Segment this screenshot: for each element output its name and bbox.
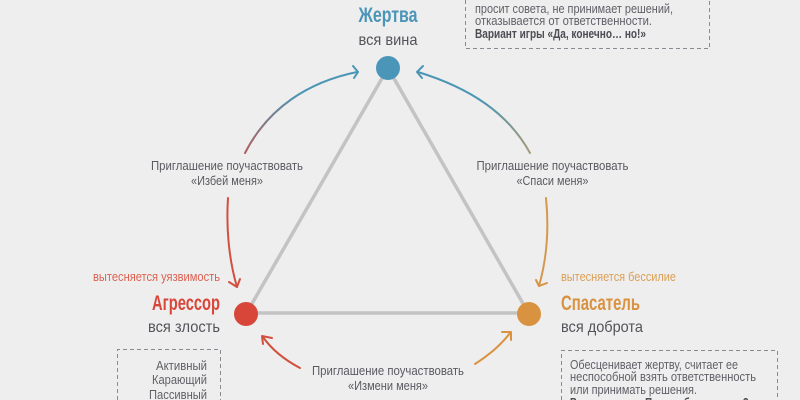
heading: rescuer bbox=[561, 269, 676, 336]
label: beat me bbox=[151, 158, 303, 188]
label: beat me: Приглашение поучаствовать bbox=[151, 158, 303, 173]
panel: victim description bbox=[466, 0, 710, 48]
node: aggressor bbox=[234, 302, 258, 326]
label: save me: «Спаси меня» bbox=[516, 173, 588, 188]
heading: aggressor: вся злость bbox=[148, 319, 220, 336]
label: save me: Приглашение поучаствовать bbox=[476, 158, 629, 173]
heading: aggressor: Агрессор bbox=[152, 292, 220, 315]
panel: victim description: просит совета, не принимает решений, bbox=[475, 1, 673, 16]
label: change me: Приглашение поучаствовать bbox=[312, 363, 464, 378]
panel: rescuer description bbox=[562, 350, 778, 400]
node: rescuer bbox=[517, 302, 541, 326]
panel: rescuer description: Обесценивает жертву, считает ее bbox=[570, 357, 738, 372]
heading: rescuer: Спасатель bbox=[561, 292, 640, 315]
panel: victim description: отказывается от ответственности. bbox=[475, 13, 652, 28]
label: save me bbox=[476, 158, 629, 188]
panel: aggressor types: Карающий bbox=[152, 372, 207, 387]
arrow: change me to aggressor bbox=[262, 336, 300, 368]
triangle diagram bbox=[246, 68, 529, 314]
arrow: rescuer to victim bbox=[417, 66, 530, 153]
label: change me bbox=[312, 363, 464, 393]
node: victim bbox=[376, 56, 400, 80]
heading: victim bbox=[358, 4, 418, 49]
heading: rescuer: вся доброта bbox=[561, 319, 643, 336]
arrow: beat me to aggressor bbox=[227, 198, 240, 287]
heading: aggressor bbox=[93, 269, 220, 336]
panel: rescuer description: или принимать решения. bbox=[570, 382, 697, 397]
arrow: change me to rescuer bbox=[475, 332, 511, 364]
arrow: aggressor to victim bbox=[245, 66, 358, 153]
arrow: save me to rescuer bbox=[536, 198, 547, 286]
heading: victim: вся вина bbox=[358, 32, 418, 49]
heading: aggressor: вытесняется уязвимость bbox=[93, 269, 220, 284]
panel: aggressor types bbox=[118, 350, 220, 400]
heading: rescuer: вытесняется бессилие bbox=[561, 269, 676, 284]
panel: victim description: Вариант игры «Да, конечно… но!» bbox=[475, 26, 646, 41]
heading: victim: Жертва bbox=[358, 4, 418, 27]
label: beat me: «Избей меня» bbox=[191, 173, 263, 188]
label: change me: «Измени меня» bbox=[348, 378, 428, 393]
panel: rescuer description: неспособной взять ответственность bbox=[570, 369, 756, 384]
panel: aggressor types: Активный bbox=[156, 358, 207, 373]
